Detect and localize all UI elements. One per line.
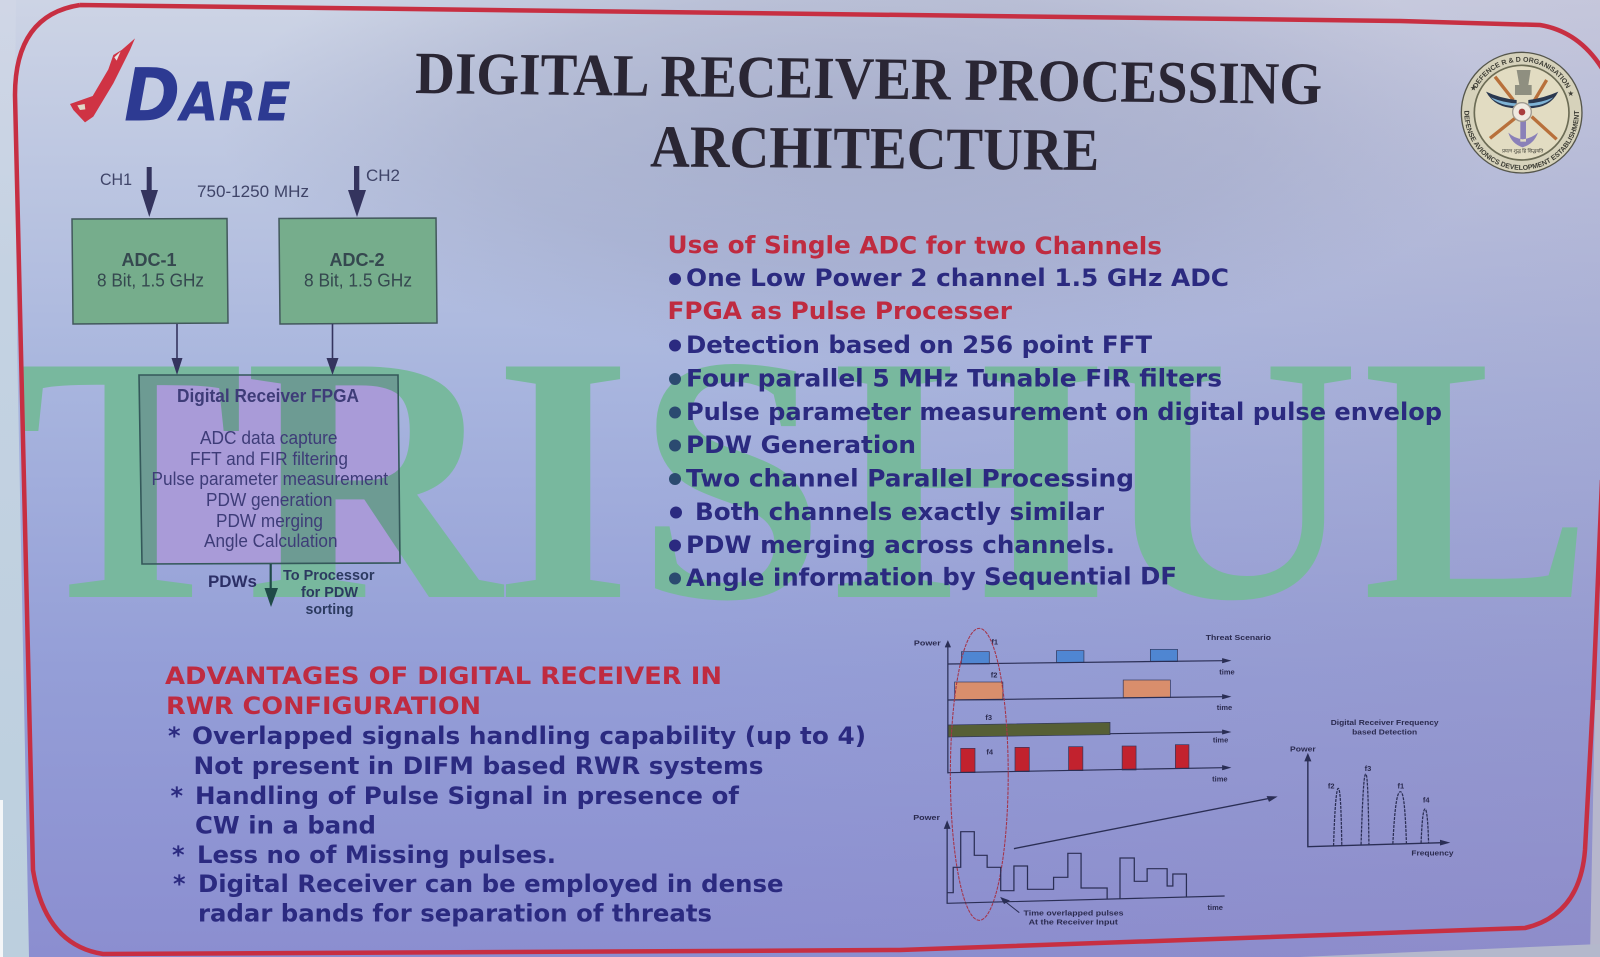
bullets: FPGA: Detection based on 256 point FFT <box>686 331 1153 359</box>
bullets: FPGA <box>669 331 1442 592</box>
box: ADC-2: 8 Bit, 1.5 GHz <box>304 270 412 290</box>
watermark: TRISHUL: U <box>1099 284 1360 674</box>
arrow: ADC-2 to FPGA <box>326 324 338 375</box>
label: to processor: sorting <box>306 602 354 618</box>
axis labels: f1 <box>991 638 998 646</box>
received waveform <box>913 797 1276 927</box>
label: to processor: To Processor <box>283 568 375 584</box>
advantage list: Digital Receiver can be employed in dense <box>198 870 784 898</box>
emblem: Defence Avionics Development Establishment: ★ <box>1567 89 1574 98</box>
watermark: TRISHUL: L <box>1362 284 1592 674</box>
received waveform: Power <box>913 813 940 822</box>
advantage list: Handling of Pulse Signal in presence of <box>195 782 740 810</box>
title <box>415 40 1323 183</box>
bullets: ADC: One Low Power 2 channel 1.5 GHz ADC <box>686 264 1229 292</box>
box: Digital Receiver FPGA: Angle Calculation <box>204 531 338 551</box>
axis labels: f4 <box>986 748 993 756</box>
box: Digital Receiver FPGA: PDW generation <box>206 490 332 510</box>
advantage list: Overlapped signals handling capability (up to 4) <box>192 722 866 750</box>
advantage list <box>168 722 866 928</box>
heading line 2: RWR CONFIGURATION <box>166 692 481 720</box>
heading: single ADC: Use of Single ADC for two Channels <box>667 231 1162 260</box>
axes <box>1290 745 1454 858</box>
bullets: FPGA: PDW merging across channels. <box>686 531 1115 559</box>
label: PDWs: PDWs <box>208 572 257 591</box>
box: ADC-1 <box>72 218 228 324</box>
bullets: FPGA: Angle information by Sequential DF <box>686 562 1177 592</box>
watermark: TRISHUL: H <box>832 284 1103 674</box>
advantage list: * <box>168 722 181 750</box>
overlap ellipse <box>950 628 1008 920</box>
axis labels <box>914 633 1272 783</box>
box: Digital Receiver FPGA: Digital Receiver FPGA <box>177 386 359 406</box>
bullets: FPGA: Both channels exactly similar <box>695 498 1104 526</box>
bullets: FPGA: Four parallel 5 MHz Tunable FIR filters <box>686 364 1222 392</box>
box: Digital Receiver FPGA: Pulse parameter measurement <box>152 469 388 489</box>
chart title <box>1331 718 1439 736</box>
axis labels: Power <box>914 639 941 648</box>
emblem: Defence Avionics Development Establishment <box>1460 52 1583 174</box>
peak labels: f2 <box>1328 782 1335 790</box>
watermark: TRISHUL: S <box>637 284 825 674</box>
chart: frequency based detection <box>1290 718 1454 858</box>
advantage list: Less no of Missing pulses. <box>197 841 556 869</box>
axis labels: f3 <box>985 713 992 722</box>
axis labels: Threat Scenario <box>1206 633 1272 642</box>
received waveform: time <box>1207 903 1223 912</box>
label: CH1: CH1 <box>100 170 132 189</box>
axis labels: time <box>1219 668 1235 676</box>
axes: Power <box>1290 745 1316 753</box>
box: ADC-1: 8 Bit, 1.5 GHz <box>97 270 204 290</box>
bullets: FPGA: Pulse parameter measurement on digital pulse envelop <box>686 398 1442 426</box>
panel: advantages <box>165 662 866 928</box>
emblem: Defence Avionics Development Establishment: प्रयत्न शुद्ध हि सिद्धयति <box>1502 148 1543 155</box>
peak labels <box>1328 764 1430 805</box>
block diagram <box>71 166 438 617</box>
peak labels: f4 <box>1423 796 1430 805</box>
box: Digital Receiver FPGA: R <box>245 284 505 674</box>
advantage list: CW in a band <box>195 812 376 840</box>
box: ADC-1: ADC-1 <box>121 250 177 270</box>
arrow: ADC-1 to FPGA <box>172 324 182 375</box>
emblem: Defence Avionics Development Establishment: DEFENCE R & D ORGANISATION <box>1472 56 1570 88</box>
icon: red jet <box>70 38 135 122</box>
advantage list: Not present in DIFM based RWR systems <box>194 752 764 780</box>
peak labels: f3 <box>1365 764 1371 773</box>
arrow: FPGA output <box>264 564 278 607</box>
watermark: TRISHUL: R <box>245 284 505 674</box>
axis labels: time <box>1213 736 1228 745</box>
axis labels: time <box>1217 703 1232 712</box>
arrow: CH1 input <box>141 167 158 217</box>
emblem: Defence Avionics Development Establishment: ★ <box>1470 84 1477 93</box>
watermark: TRISHUL: T <box>18 284 244 674</box>
bullets: FPGA: PDW Generation <box>686 431 916 459</box>
title line 2: ARCHITECTURE <box>650 114 1099 183</box>
axes: Frequency <box>1411 849 1454 858</box>
chart title: Digital Receiver Frequency <box>1331 718 1439 727</box>
label: CH2: CH2 <box>366 166 400 185</box>
chart: threat scenario timing <box>913 628 1276 927</box>
panel: feature list <box>667 231 1442 592</box>
label: to processor: for PDW <box>301 585 358 601</box>
bullets: FPGA: Two channel Parallel Processing <box>686 464 1134 492</box>
box: Digital Receiver FPGA: FFT and FIR filtering <box>190 449 348 469</box>
wordmark: DARE <box>124 55 291 139</box>
axis labels: time <box>1212 775 1228 783</box>
peak labels: f1 <box>1397 782 1404 790</box>
chart title: based Detection <box>1352 728 1417 736</box>
box: Digital Receiver FPGA <box>138 374 401 565</box>
label: to processor <box>283 568 375 618</box>
advantage list: * <box>170 782 184 810</box>
spectrum peaks <box>1334 774 1429 846</box>
received waveform: Time overlapped pulses <box>1024 909 1124 918</box>
box: ADC-2: ADC-2 <box>329 250 385 270</box>
received waveform: At the Receiver Input <box>1029 918 1119 927</box>
advantage list: * <box>172 841 185 869</box>
heading line 1: ADVANTAGES OF DIGITAL RECEIVER IN <box>165 662 722 690</box>
heading: FPGA: FPGA as Pulse Processer <box>668 297 1012 325</box>
axis labels: f2 <box>991 671 997 680</box>
advantage list: * <box>173 870 186 898</box>
axes <box>945 642 1229 773</box>
watermark: TRISHUL: I <box>494 284 632 674</box>
logo: DARE <box>70 38 291 139</box>
box: Digital Receiver FPGA: T <box>18 284 244 674</box>
box: Digital Receiver FPGA: PDW merging <box>216 511 323 531</box>
advantage list: radar bands for separation of threats <box>198 900 712 928</box>
box: Digital Receiver FPGA: ADC data capture <box>200 428 338 448</box>
box: ADC-2 <box>279 218 437 324</box>
watermark: TRISHUL <box>18 284 1592 674</box>
emblem: Defence Avionics Development Establishment: DEFENSE AVIONICS DEVELOPMENT ESTABLISHMENT <box>1464 110 1579 170</box>
title line 1: DIGITAL RECEIVER PROCESSING <box>415 40 1323 117</box>
arrow: CH2 input <box>348 166 366 217</box>
label: frequency band: 750-1250 MHz <box>197 182 309 201</box>
pulse bars <box>948 649 1189 773</box>
